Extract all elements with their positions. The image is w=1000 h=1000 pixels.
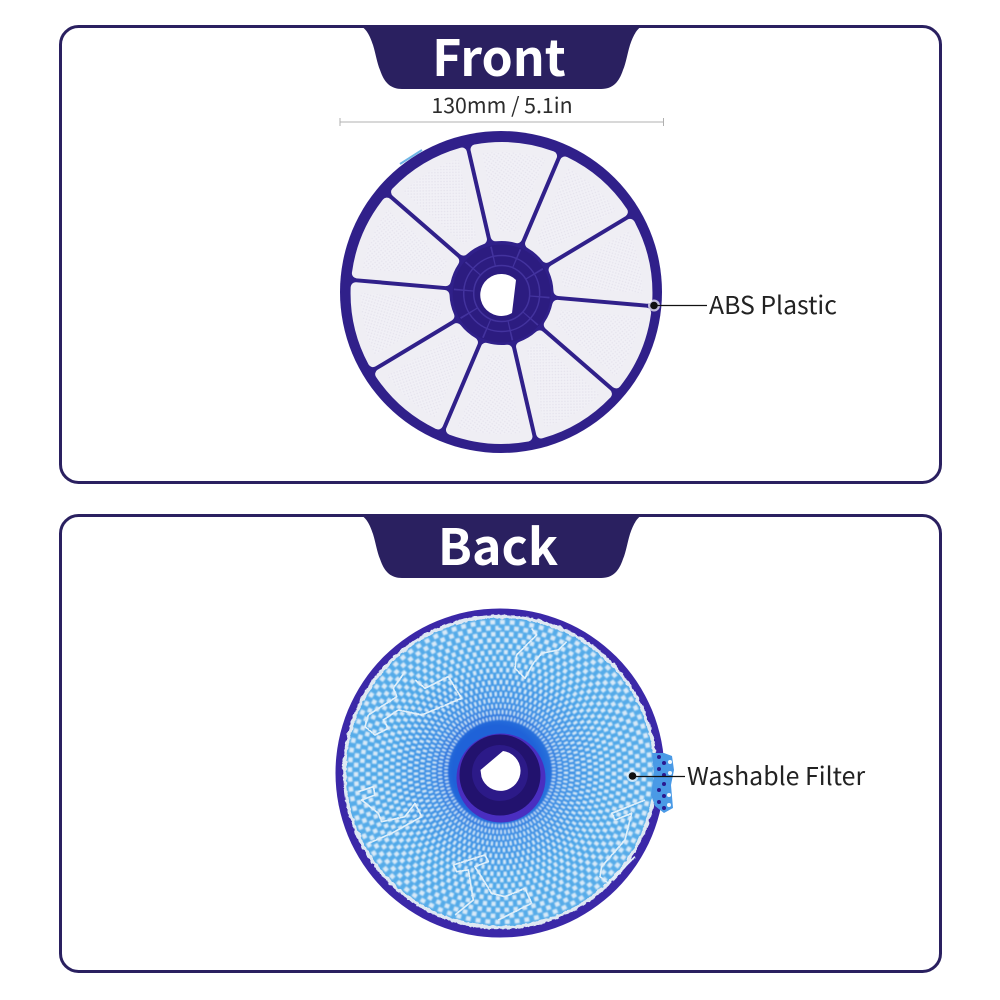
heading tab: Front: Front (432, 19, 566, 91)
mesh flap at right edge (651, 753, 674, 813)
hub (453, 244, 551, 342)
dimension label: 130mm / 5.1in: 130mm / 5.1in (431, 89, 573, 120)
panel: back (60, 508, 940, 972)
filter photo: back disc with mesh (336, 608, 674, 938)
heading tab: Back (358, 508, 645, 580)
panel: front (60, 19, 940, 482)
callout: Washable Filter: Washable Filter (687, 757, 865, 793)
filter photo: front disc with spokes (340, 131, 662, 453)
center tube with hole (456, 734, 546, 822)
fuzzy white rim (344, 616, 656, 928)
heading tab: Front (358, 19, 645, 91)
heading tab: Back: Back (438, 508, 558, 580)
mesh holes: staggered concentric rows (350, 622, 650, 922)
stitched white outlines (358, 628, 645, 920)
callout: ABS Plastic (648, 286, 837, 322)
dimension label: 130mm / 5.1in (340, 89, 664, 126)
callout: ABS Plastic: ABS Plastic (709, 286, 837, 322)
